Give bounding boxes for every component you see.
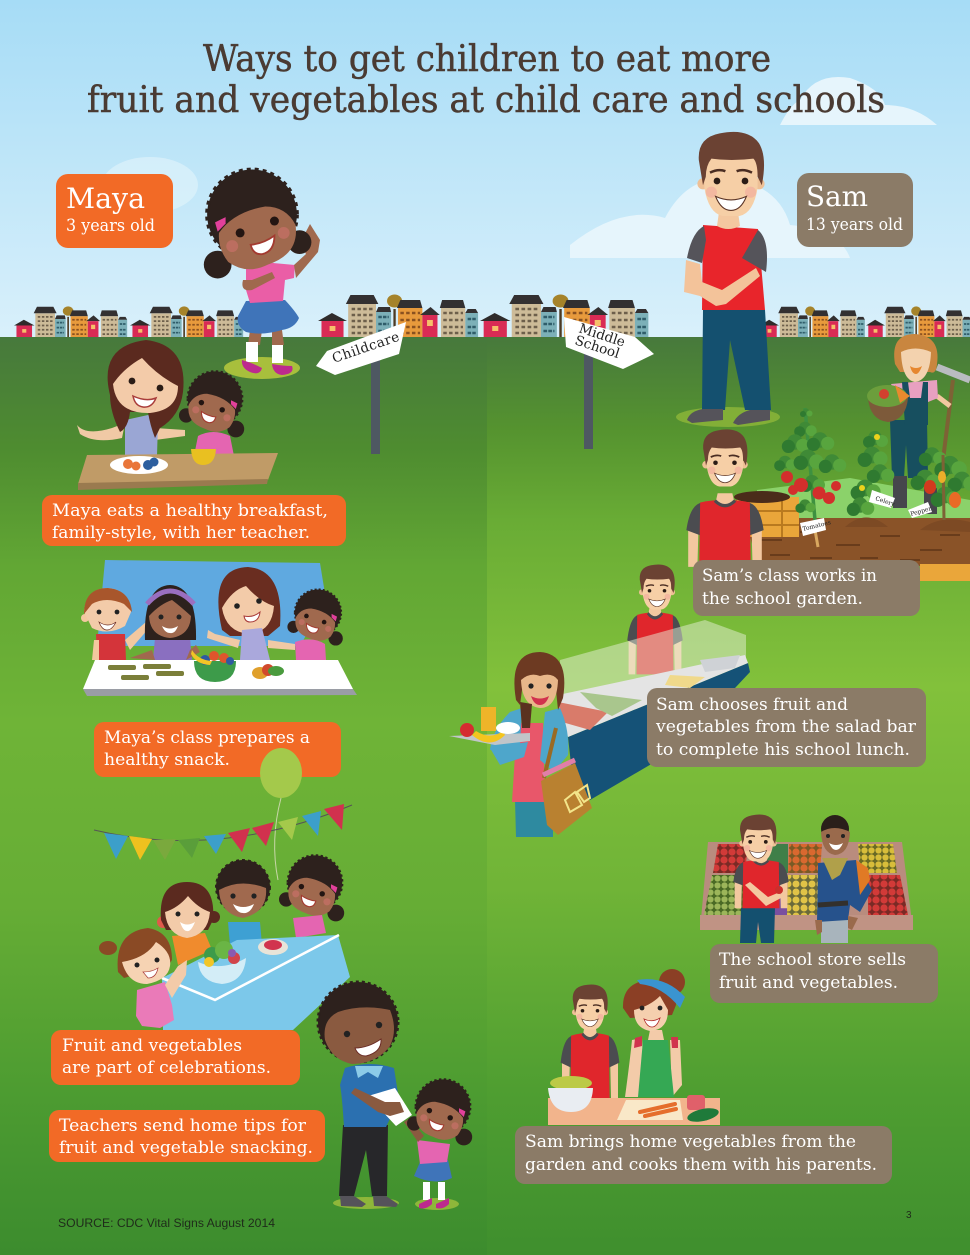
sign: Childcare: Childcare bbox=[330, 329, 401, 367]
scene: school store bbox=[700, 815, 913, 943]
town skyline bbox=[14, 294, 970, 337]
character: Maya large bbox=[204, 170, 320, 379]
grass ground: childcare side bbox=[0, 337, 487, 1255]
label: salad bar bbox=[647, 688, 926, 767]
label: school store: fruit and vegetables. bbox=[719, 973, 898, 992]
label: garden: the school garden. bbox=[702, 589, 863, 608]
label: salad bar: to complete his school lunch. bbox=[656, 740, 910, 759]
label: school store bbox=[710, 944, 938, 1003]
badge: Maya: Maya bbox=[66, 182, 145, 215]
label: cooking: Sam brings home vegetables from the bbox=[525, 1132, 856, 1151]
label: salad bar: Sam chooses fruit and bbox=[656, 695, 848, 714]
page number: 3 bbox=[906, 1210, 912, 1221]
scene: celebration bbox=[99, 855, 350, 1030]
label: garden bbox=[693, 560, 920, 616]
pepper plant bbox=[908, 447, 970, 520]
label: tips bbox=[49, 1110, 325, 1162]
label: snack: Maya’s class prepares a bbox=[104, 728, 310, 747]
label: snack: healthy snack. bbox=[104, 750, 230, 769]
scene: school garden bbox=[686, 334, 970, 581]
label: cooking: garden and cooks them with his parents. bbox=[525, 1155, 877, 1174]
badge: Sam: 13 years old bbox=[806, 215, 903, 234]
label: cooking bbox=[515, 1126, 892, 1184]
label: tips: fruit and vegetable snacking. bbox=[59, 1138, 313, 1157]
source note: SOURCE: CDC Vital Signs August 2014 bbox=[58, 1216, 275, 1230]
label: school store: The school store sells bbox=[719, 950, 906, 969]
label: celebrations bbox=[51, 1030, 300, 1085]
scene: cooking at home bbox=[548, 969, 720, 1125]
sign: Middle School: School bbox=[573, 333, 622, 362]
label: snack bbox=[94, 722, 341, 777]
label: tips: Teachers send home tips for bbox=[59, 1116, 306, 1135]
title: fruit and vegetables at child care and schools bbox=[87, 80, 885, 121]
grass ground: school side bbox=[487, 337, 970, 1255]
clouds bbox=[102, 77, 937, 258]
title: Ways to get children to eat more bbox=[203, 39, 771, 80]
farmer bbox=[867, 334, 970, 514]
title bbox=[87, 39, 885, 121]
balloon bbox=[260, 748, 302, 880]
badge: Sam: Sam bbox=[806, 180, 868, 213]
label: salad bar: vegetables from the salad bar bbox=[655, 717, 916, 736]
sky background bbox=[0, 0, 970, 338]
scene: teacher and Maya bbox=[318, 982, 472, 1210]
cucumber plant bbox=[847, 431, 896, 516]
scene: healthy breakfast bbox=[77, 340, 278, 490]
cucumber plant: Celery bbox=[874, 495, 896, 508]
sign: Middle School: Middle bbox=[577, 321, 627, 351]
badge: Maya: 3 years old bbox=[66, 216, 155, 235]
tomato plant: Tomatoes bbox=[802, 519, 832, 533]
label: celebrations: are part of celebrations. bbox=[62, 1058, 271, 1077]
girl with tray bbox=[449, 652, 592, 837]
label: breakfast bbox=[42, 495, 346, 546]
scene: class prepares snack bbox=[81, 560, 357, 696]
sign: Childcare bbox=[316, 322, 406, 454]
bunting bbox=[94, 804, 352, 860]
label: celebrations: Fruit and vegetables bbox=[62, 1036, 242, 1055]
badge: Maya bbox=[56, 174, 173, 248]
label: breakfast: Maya eats a healthy breakfast, bbox=[52, 501, 328, 520]
pepper plant: Pepper bbox=[910, 505, 932, 518]
character: Sam large bbox=[676, 132, 780, 427]
scene: salad bar bbox=[449, 564, 750, 837]
sign: Middle School bbox=[564, 317, 654, 449]
label: breakfast: family-style, with her teacher. bbox=[52, 523, 310, 542]
label: garden: Sam’s class works in bbox=[702, 566, 877, 585]
badge: Sam bbox=[797, 173, 913, 247]
tomato plant bbox=[774, 408, 846, 547]
